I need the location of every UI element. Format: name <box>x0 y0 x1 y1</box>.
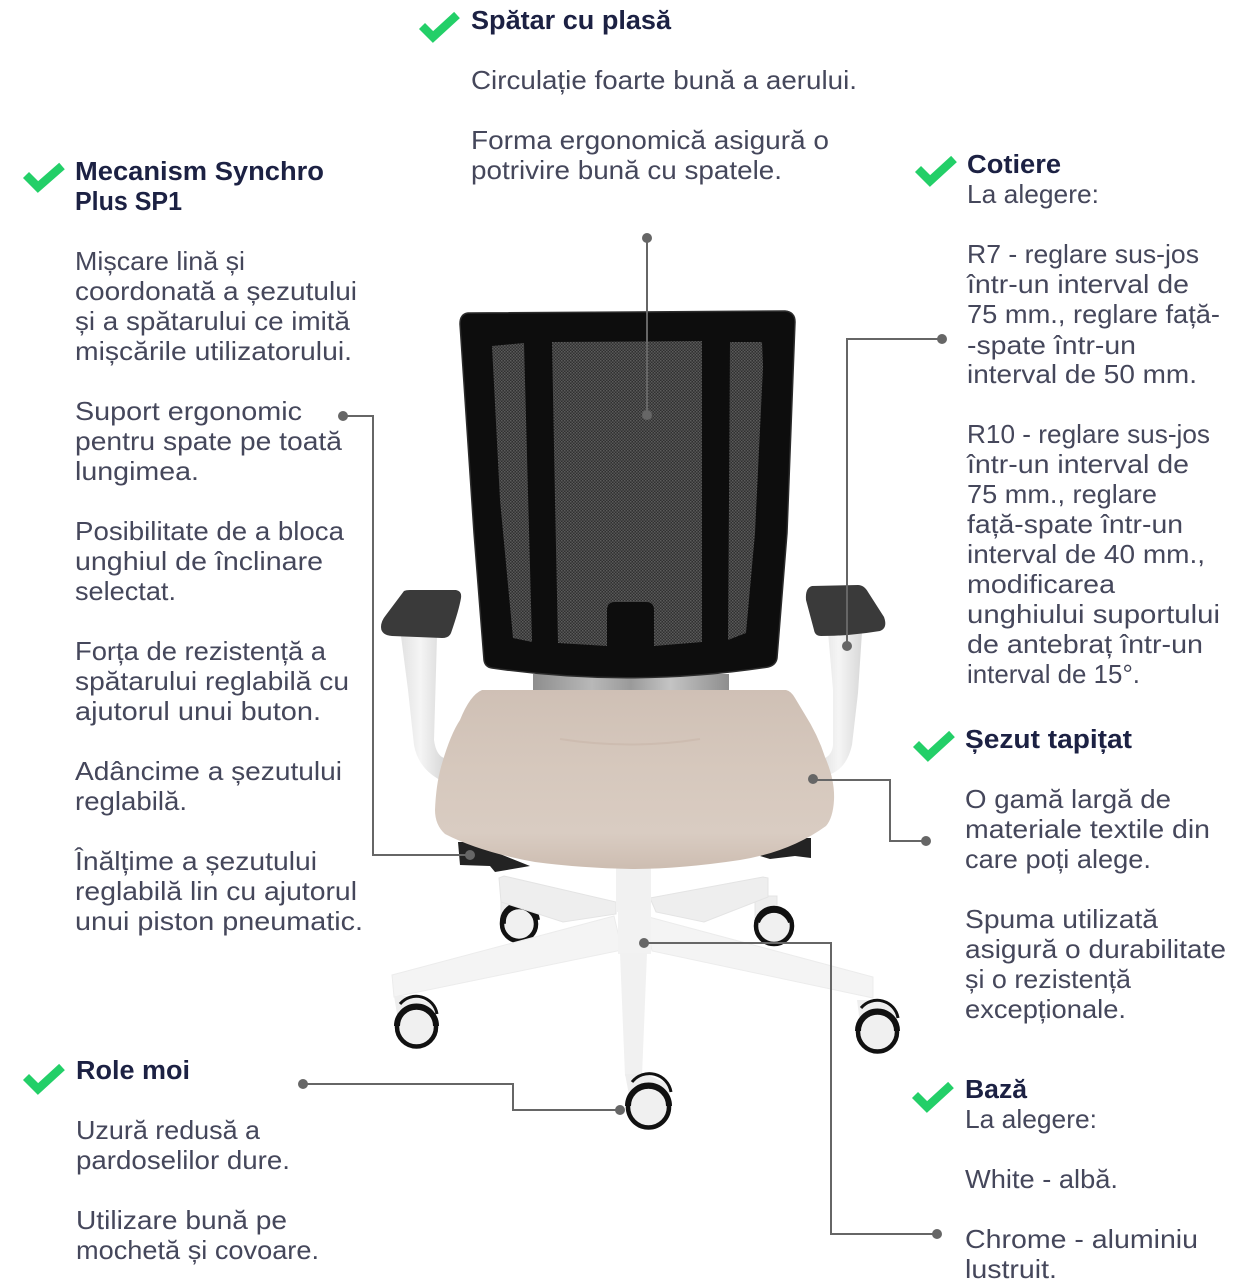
text block: și o rezistență <box>965 964 1132 994</box>
back casters <box>501 896 792 944</box>
panel: armrests (Cotiere) <box>918 151 1220 689</box>
chair illustration <box>381 311 898 1128</box>
upholstered seat <box>435 690 834 869</box>
leader: seat <box>808 774 931 846</box>
arm supports <box>401 632 862 780</box>
text block: unghiului suportului <box>967 599 1220 629</box>
text block: Posibilitate de a bloca <box>75 516 345 546</box>
text block: White - albă. <box>965 1164 1118 1194</box>
text block: Spuma utilizată <box>965 904 1159 934</box>
text block: pentru spate pe toată <box>75 426 343 456</box>
text block <box>966 179 1220 689</box>
heading: Șezut tapițat <box>965 726 1133 754</box>
text block: O gamă largă de <box>965 784 1171 814</box>
text block: unui piston pneumatic. <box>75 906 363 936</box>
text block: interval de 15°. <box>967 659 1140 689</box>
icon: check <box>918 159 954 181</box>
text block: La alegere: <box>965 1104 1097 1134</box>
icon: check <box>422 15 457 37</box>
mesh backrest <box>460 311 795 678</box>
text block: Circulație foarte bună a aerului. <box>471 65 857 95</box>
text block: lungimea. <box>75 456 199 486</box>
text block: Suport ergonomic <box>75 396 302 426</box>
text block: pardoselilor dure. <box>76 1145 290 1175</box>
text block: față-spate într-un <box>967 509 1183 539</box>
heading: Cotiere <box>967 151 1061 179</box>
heading <box>75 158 324 216</box>
text block: La alegere: <box>967 179 1099 209</box>
text block: reglabilă lin cu ajutorul <box>75 876 357 906</box>
text block: într-un interval de <box>966 449 1189 479</box>
text block: reglabilă. <box>75 786 187 816</box>
heading: Mecanism Synchro <box>75 158 324 186</box>
text block <box>76 1115 319 1265</box>
text block: de antebraț într-un <box>967 629 1203 659</box>
panel: seat (Șezut tapițat) <box>916 726 1226 1024</box>
icon: check <box>915 1085 951 1107</box>
text block <box>74 246 363 936</box>
text block: Uzură redusă a <box>76 1115 261 1145</box>
leader: base <box>639 938 942 1239</box>
heading: Plus SP1 <box>75 188 182 216</box>
leader: mechanism <box>338 411 475 860</box>
text block: 75 mm., reglare față- <box>967 299 1220 329</box>
text block: asigură o durabilitate <box>965 934 1226 964</box>
heading: Spătar cu plasă <box>471 7 672 35</box>
leader: armrest <box>842 334 947 651</box>
panel: casters (Role moi) <box>26 1057 319 1265</box>
panel: base (Bază) <box>915 1076 1198 1284</box>
text block: Chrome - aluminiu <box>965 1224 1198 1254</box>
text block <box>965 1104 1198 1284</box>
text block <box>471 65 857 185</box>
seat mechanism <box>458 838 811 872</box>
leader: backrest <box>642 233 652 420</box>
text block: spătarului reglabilă cu <box>75 666 349 696</box>
text block: modificarea <box>967 569 1116 599</box>
text block: unghiul de înclinare <box>75 546 323 576</box>
icon: check <box>26 1067 62 1089</box>
icon: check <box>916 734 952 756</box>
text block: mișcările utilizatorului. <box>75 336 352 366</box>
text block: Forța de rezistență a <box>75 636 327 666</box>
text block: Adâncime a șezutului <box>75 756 342 786</box>
text block: -spate într-un <box>967 330 1136 360</box>
backrest mechanism strip <box>533 674 729 692</box>
heading: Role moi <box>76 1057 190 1085</box>
armrests <box>381 585 885 638</box>
icon: check <box>26 166 62 187</box>
text block: materiale textile din <box>965 814 1210 844</box>
text block: R10 - reglare sus-jos <box>967 419 1210 449</box>
text block: potrivire bună cu spatele. <box>471 155 782 185</box>
text block: R7 - reglare sus-jos <box>967 239 1199 269</box>
text block: într-un interval de <box>966 269 1189 299</box>
text block: care poți alege. <box>965 844 1151 874</box>
text block: Forma ergonomică asigură o <box>471 125 829 155</box>
text block: Utilizare bună pe <box>76 1205 287 1235</box>
text block: 75 mm., reglare <box>967 479 1157 509</box>
text block: mochetă și covoare. <box>76 1235 319 1265</box>
panel: mechanism (Mecanism Synchro Plus SP1) <box>26 158 363 936</box>
leader lines <box>298 233 947 1239</box>
text block: ajutorul unui buton. <box>75 696 321 726</box>
text block: excepționale. <box>965 994 1126 1024</box>
leader: casters <box>298 1079 625 1115</box>
heading: Bază <box>965 1076 1028 1104</box>
text block: și a spătarului ce imită <box>75 306 351 336</box>
text block: Mișcare lină și <box>75 246 245 276</box>
panel: backrest (Spătar cu plasă) <box>422 7 857 185</box>
text block: Înălțime a șezutului <box>74 846 317 876</box>
five-star base <box>392 868 873 1076</box>
text block: coordonată a șezutului <box>75 276 357 306</box>
text block: selectat. <box>75 576 176 606</box>
text block: lustruit. <box>965 1254 1057 1284</box>
text block: interval de 50 mm. <box>967 359 1197 389</box>
text block <box>965 784 1226 1024</box>
front casters <box>394 996 898 1128</box>
text block: interval de 40 mm., <box>967 539 1205 569</box>
